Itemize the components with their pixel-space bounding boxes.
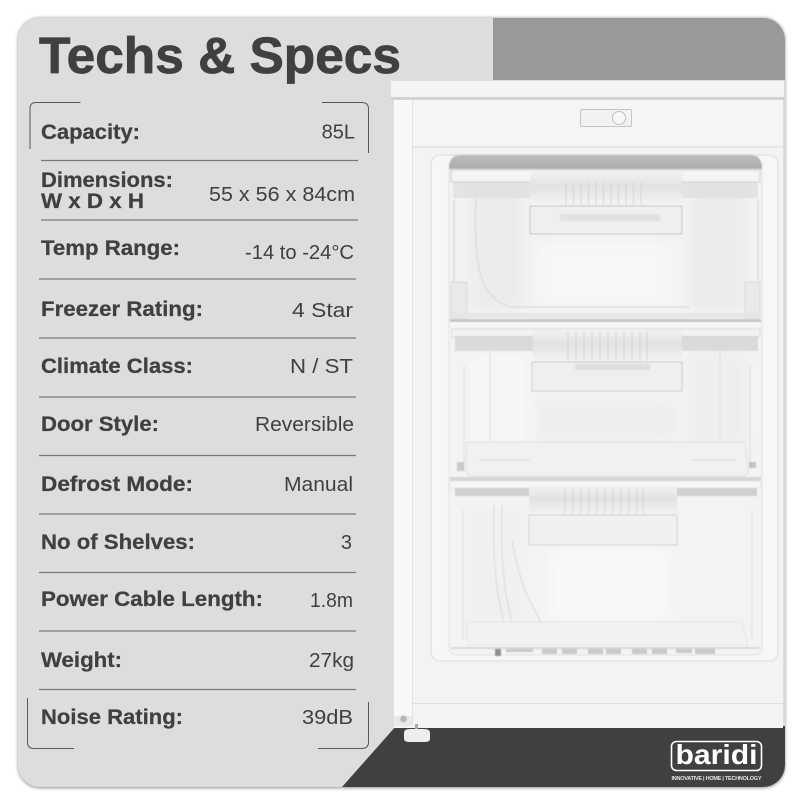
screw [400,716,407,722]
row: power cable: Power Cable Length: [41,588,263,611]
freezer illustration [391,81,784,742]
freezer body [394,98,783,728]
brand logo: INNOVATIVE | HOME | TECHNOLOGY [672,776,762,782]
drawer 1 [451,170,760,318]
row: weight: 27kg [309,650,354,672]
brand logo [672,739,762,782]
row: noise rating [41,706,353,729]
bottom vents [495,649,715,656]
row: capacity [41,121,355,144]
row: dimensions: Dimensions: [41,169,173,192]
top bracket [30,102,368,153]
title: Techs & Specs [39,27,401,84]
row: defrost mode: Manual [284,474,353,496]
row: power cable: 1.8m [310,590,353,612]
row: noise rating: Noise Rating: [41,706,183,729]
row: noise rating: 39dB [302,707,353,729]
row: freezer rating: Freezer Rating: [41,298,203,321]
row: dimensions: W x D x H [41,190,144,213]
row: weight: Weight: [41,649,122,672]
row: capacity: Capacity: [41,121,140,144]
row: shelves [41,531,352,554]
row: door style: Reversible [255,414,354,436]
row: capacity: 85L [322,122,355,144]
drawer 3 [451,486,759,649]
top shade [449,155,762,169]
drawer 2 [452,329,760,476]
row: shelves: 3 [341,532,352,554]
shelf 1 [450,313,762,322]
top lid [391,81,784,97]
row: climate class [41,355,353,378]
row: dimensions [41,169,355,213]
row: defrost mode: Defrost Mode: [41,473,193,496]
row: temp range: Temp Range: [41,237,180,260]
row: door style [41,413,354,436]
row: temp range: -14 to -24°C [245,242,354,264]
row: defrost mode [41,473,353,496]
freezer interior [449,155,762,656]
row: door style: Door Style: [41,413,159,436]
row: freezer rating [41,298,353,322]
row: shelves: No of Shelves: [41,531,195,554]
row: freezer rating: 4 Star [292,300,353,322]
dark floor [342,726,785,787]
row dividers [39,160,358,690]
row: temp range [41,237,354,264]
brand logo: baridi [676,739,758,770]
door seal [431,155,778,661]
row: dimensions: 55 x 56 x 84cm [209,184,355,206]
bottom bracket [28,698,368,748]
soft interior tones [470,190,745,620]
control panel [413,109,783,148]
row: weight [41,649,354,672]
grey header block [493,18,785,80]
lower panel line [413,703,783,704]
freezer adjustable foot [404,724,430,742]
row: power cable [41,588,353,612]
row: climate class: N / ST [290,356,353,378]
shelf 2 [450,462,762,482]
row: climate class: Climate Class: [41,355,193,378]
